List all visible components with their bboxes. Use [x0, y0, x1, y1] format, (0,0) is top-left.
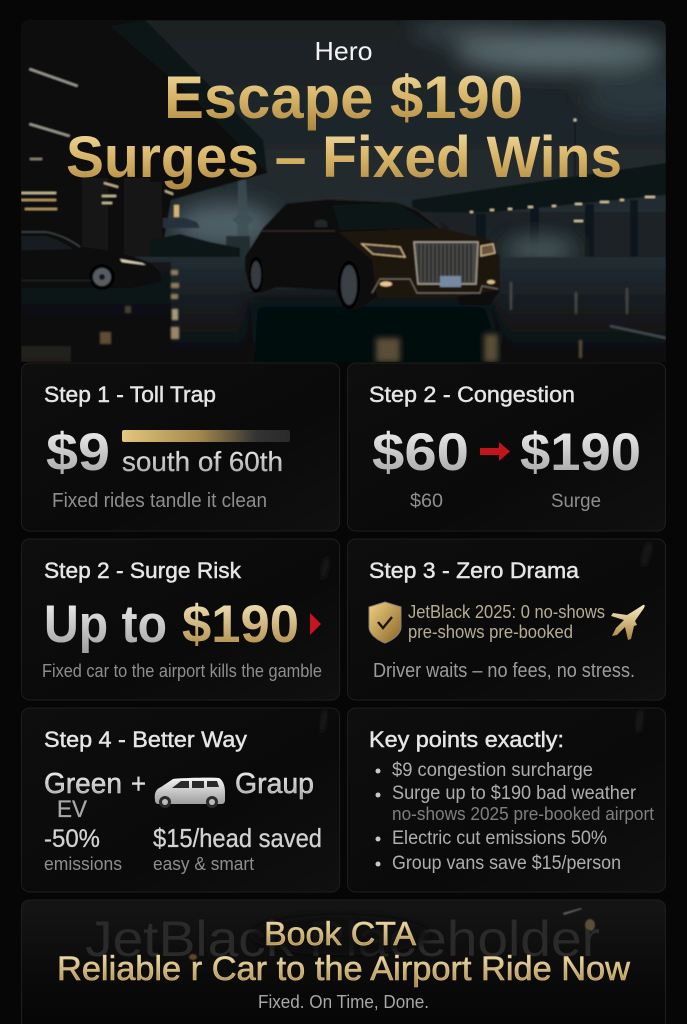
arrow: red marker	[310, 613, 321, 635]
heading: Key points exactly:	[369, 727, 564, 752]
arrow: red	[480, 442, 510, 461]
panel: step 2 surge risk	[22, 539, 340, 700]
icon: white van	[155, 778, 225, 808]
hero title	[66, 64, 622, 190]
green label: Green	[44, 768, 122, 800]
bar caption: south of 60th	[122, 446, 283, 477]
storm clouds	[175, 22, 687, 247]
note: Driver waits – no fees, no stress.	[373, 660, 635, 682]
emissions stat: -50%	[44, 825, 100, 853]
note: Fixed rides tandle it clean	[52, 490, 267, 512]
panel: step 2 congestion	[348, 363, 666, 531]
bullet list: no-shows 2025 pre-booked airport	[392, 804, 654, 824]
parked car left	[21, 232, 161, 290]
group label: Graup	[235, 768, 314, 800]
price to: $190	[520, 423, 641, 482]
proof text: JetBlack 2025: 0 no-shows	[408, 602, 605, 622]
bullet list	[376, 760, 654, 874]
wheels	[338, 261, 360, 309]
ceiling lights	[21, 68, 179, 217]
bullet list: Electric cut emissions 50%	[392, 828, 607, 849]
pillars	[82, 178, 162, 258]
label from: $60	[410, 491, 443, 512]
hero title: Escape $190	[164, 64, 523, 131]
plate	[440, 276, 461, 287]
headlights	[362, 244, 405, 257]
price from: $60	[372, 423, 469, 482]
CTA line: Reliable r Car to the Airport Ride Now	[57, 950, 630, 988]
panel: key points	[348, 708, 666, 892]
surge price: $190	[182, 595, 299, 654]
car reflection	[250, 300, 505, 372]
panel: step 4 better way	[22, 708, 340, 892]
panel: step 3 zero drama	[348, 539, 666, 700]
control tower	[233, 178, 252, 235]
windows	[320, 219, 321, 220]
icon: gold shield check	[369, 602, 401, 643]
CTA heading: Book CTA	[264, 915, 416, 952]
bullet list: Surge up to $190 bad weather	[392, 783, 637, 804]
gold progress bar	[122, 430, 290, 442]
proof text: pre-shows pre-booked	[408, 622, 573, 642]
panel: step 1 toll trap	[22, 363, 340, 531]
EV label: EV	[57, 796, 87, 823]
terminal overhang left	[21, 20, 267, 262]
heading: Step 4 - Better Way	[44, 727, 247, 752]
CTA tagline: Fixed. On Time, Done.	[258, 992, 429, 1012]
icon: gold plane	[611, 605, 645, 640]
emissions caption: emissions	[44, 854, 122, 874]
hero title: Surges – Fixed Wins	[66, 125, 622, 190]
up to label: Up to	[44, 595, 167, 654]
distant bridge right	[412, 117, 666, 258]
grille	[414, 242, 478, 284]
glare streak	[189, 908, 595, 960]
bullet list: Group vans save $15/person	[392, 853, 621, 874]
fog lamps and bumper	[380, 282, 392, 286]
panel: booking call to action	[22, 900, 666, 1024]
savings caption: easy & smart	[153, 854, 254, 874]
distant buildings	[163, 218, 200, 228]
big number: $9	[46, 423, 110, 482]
ground reflections	[21, 270, 666, 362]
bullet list: $9 congestion surcharge	[392, 760, 593, 781]
label to: Surge	[551, 491, 601, 512]
note: Fixed car to the airport kills the gamble	[42, 661, 322, 681]
plus sign: +	[131, 768, 146, 799]
proof text	[408, 602, 605, 642]
ghost watermark: JetBlack Placeholder	[85, 911, 600, 967]
heading: Step 3 - Zero Drama	[369, 558, 580, 583]
black sedan	[245, 199, 500, 310]
hero eyebrow label: Hero	[314, 36, 372, 66]
wet ground	[21, 257, 666, 362]
savings stat: $15/head saved	[153, 823, 322, 853]
heading: Step 2 - Congestion	[369, 382, 575, 407]
heading: Step 2 - Surge Risk	[44, 558, 242, 583]
hero photo: black sedan at rainy airport	[21, 20, 687, 372]
heading: Step 1 - Toll Trap	[44, 382, 216, 407]
